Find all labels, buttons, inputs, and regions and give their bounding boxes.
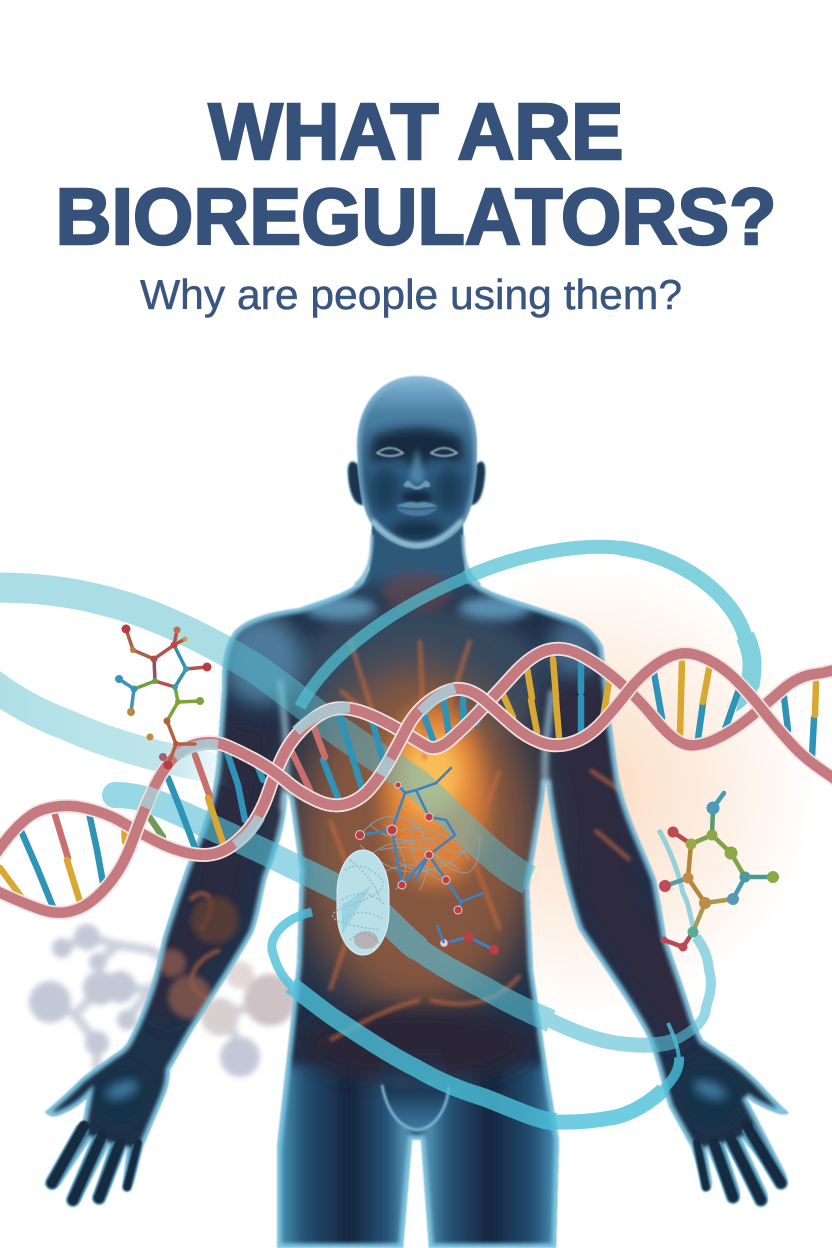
translucent strand highlights [146, 688, 455, 845]
neck [355, 525, 480, 612]
rim light on body edge [45, 540, 789, 1248]
fine net cluster [360, 815, 480, 890]
orange veins [190, 640, 630, 1040]
DNA strand B [0, 653, 832, 913]
ribbon: mid band sweeping to lower right [115, 795, 711, 1045]
palm tones [92, 1070, 742, 1105]
ribbon tip [736, 684, 760, 712]
peach background glow [365, 565, 815, 1015]
ribbon: upper-left diagonal band [0, 588, 529, 880]
capsule [333, 850, 389, 955]
ribbon: left tail band [0, 675, 235, 772]
ears [348, 462, 485, 505]
glowing chest core [383, 705, 487, 885]
upper-left molecule [115, 624, 212, 770]
title line: WHAT ARE: WHAT ARE [208, 87, 624, 176]
blurred grey background molecules [29, 924, 296, 1077]
arm organelles [158, 896, 239, 1019]
DNA base-pair rungs [0, 659, 816, 907]
human figure [45, 376, 789, 1248]
title [56, 87, 776, 261]
left hand fingers [52, 1126, 138, 1200]
body silhouette [45, 540, 789, 1248]
right molecule [659, 793, 779, 952]
head [357, 376, 477, 549]
right hand fingers [697, 1126, 781, 1200]
blue molecular bonds [360, 768, 483, 910]
lips [396, 502, 438, 516]
teal ribbons [0, 547, 760, 1122]
nose [404, 481, 430, 490]
nose highlight [409, 448, 425, 484]
ribbon: lower loop [272, 912, 679, 1122]
arm-to-torso light edges [280, 680, 552, 810]
central molecular network [356, 768, 483, 914]
DNA double helix [0, 649, 832, 913]
small lower molecule [437, 925, 499, 955]
subtitle: Why are people using them? [140, 271, 682, 318]
DNA strand A [0, 649, 832, 862]
torso and arm shading [296, 603, 550, 732]
eyes [377, 448, 457, 456]
legs [270, 1065, 566, 1248]
face shadows [370, 428, 464, 470]
groin form [380, 1045, 449, 1130]
title line: BIOREGULATORS?: BIOREGULATORS? [56, 172, 776, 261]
ribbon: big upper loop [300, 547, 760, 712]
